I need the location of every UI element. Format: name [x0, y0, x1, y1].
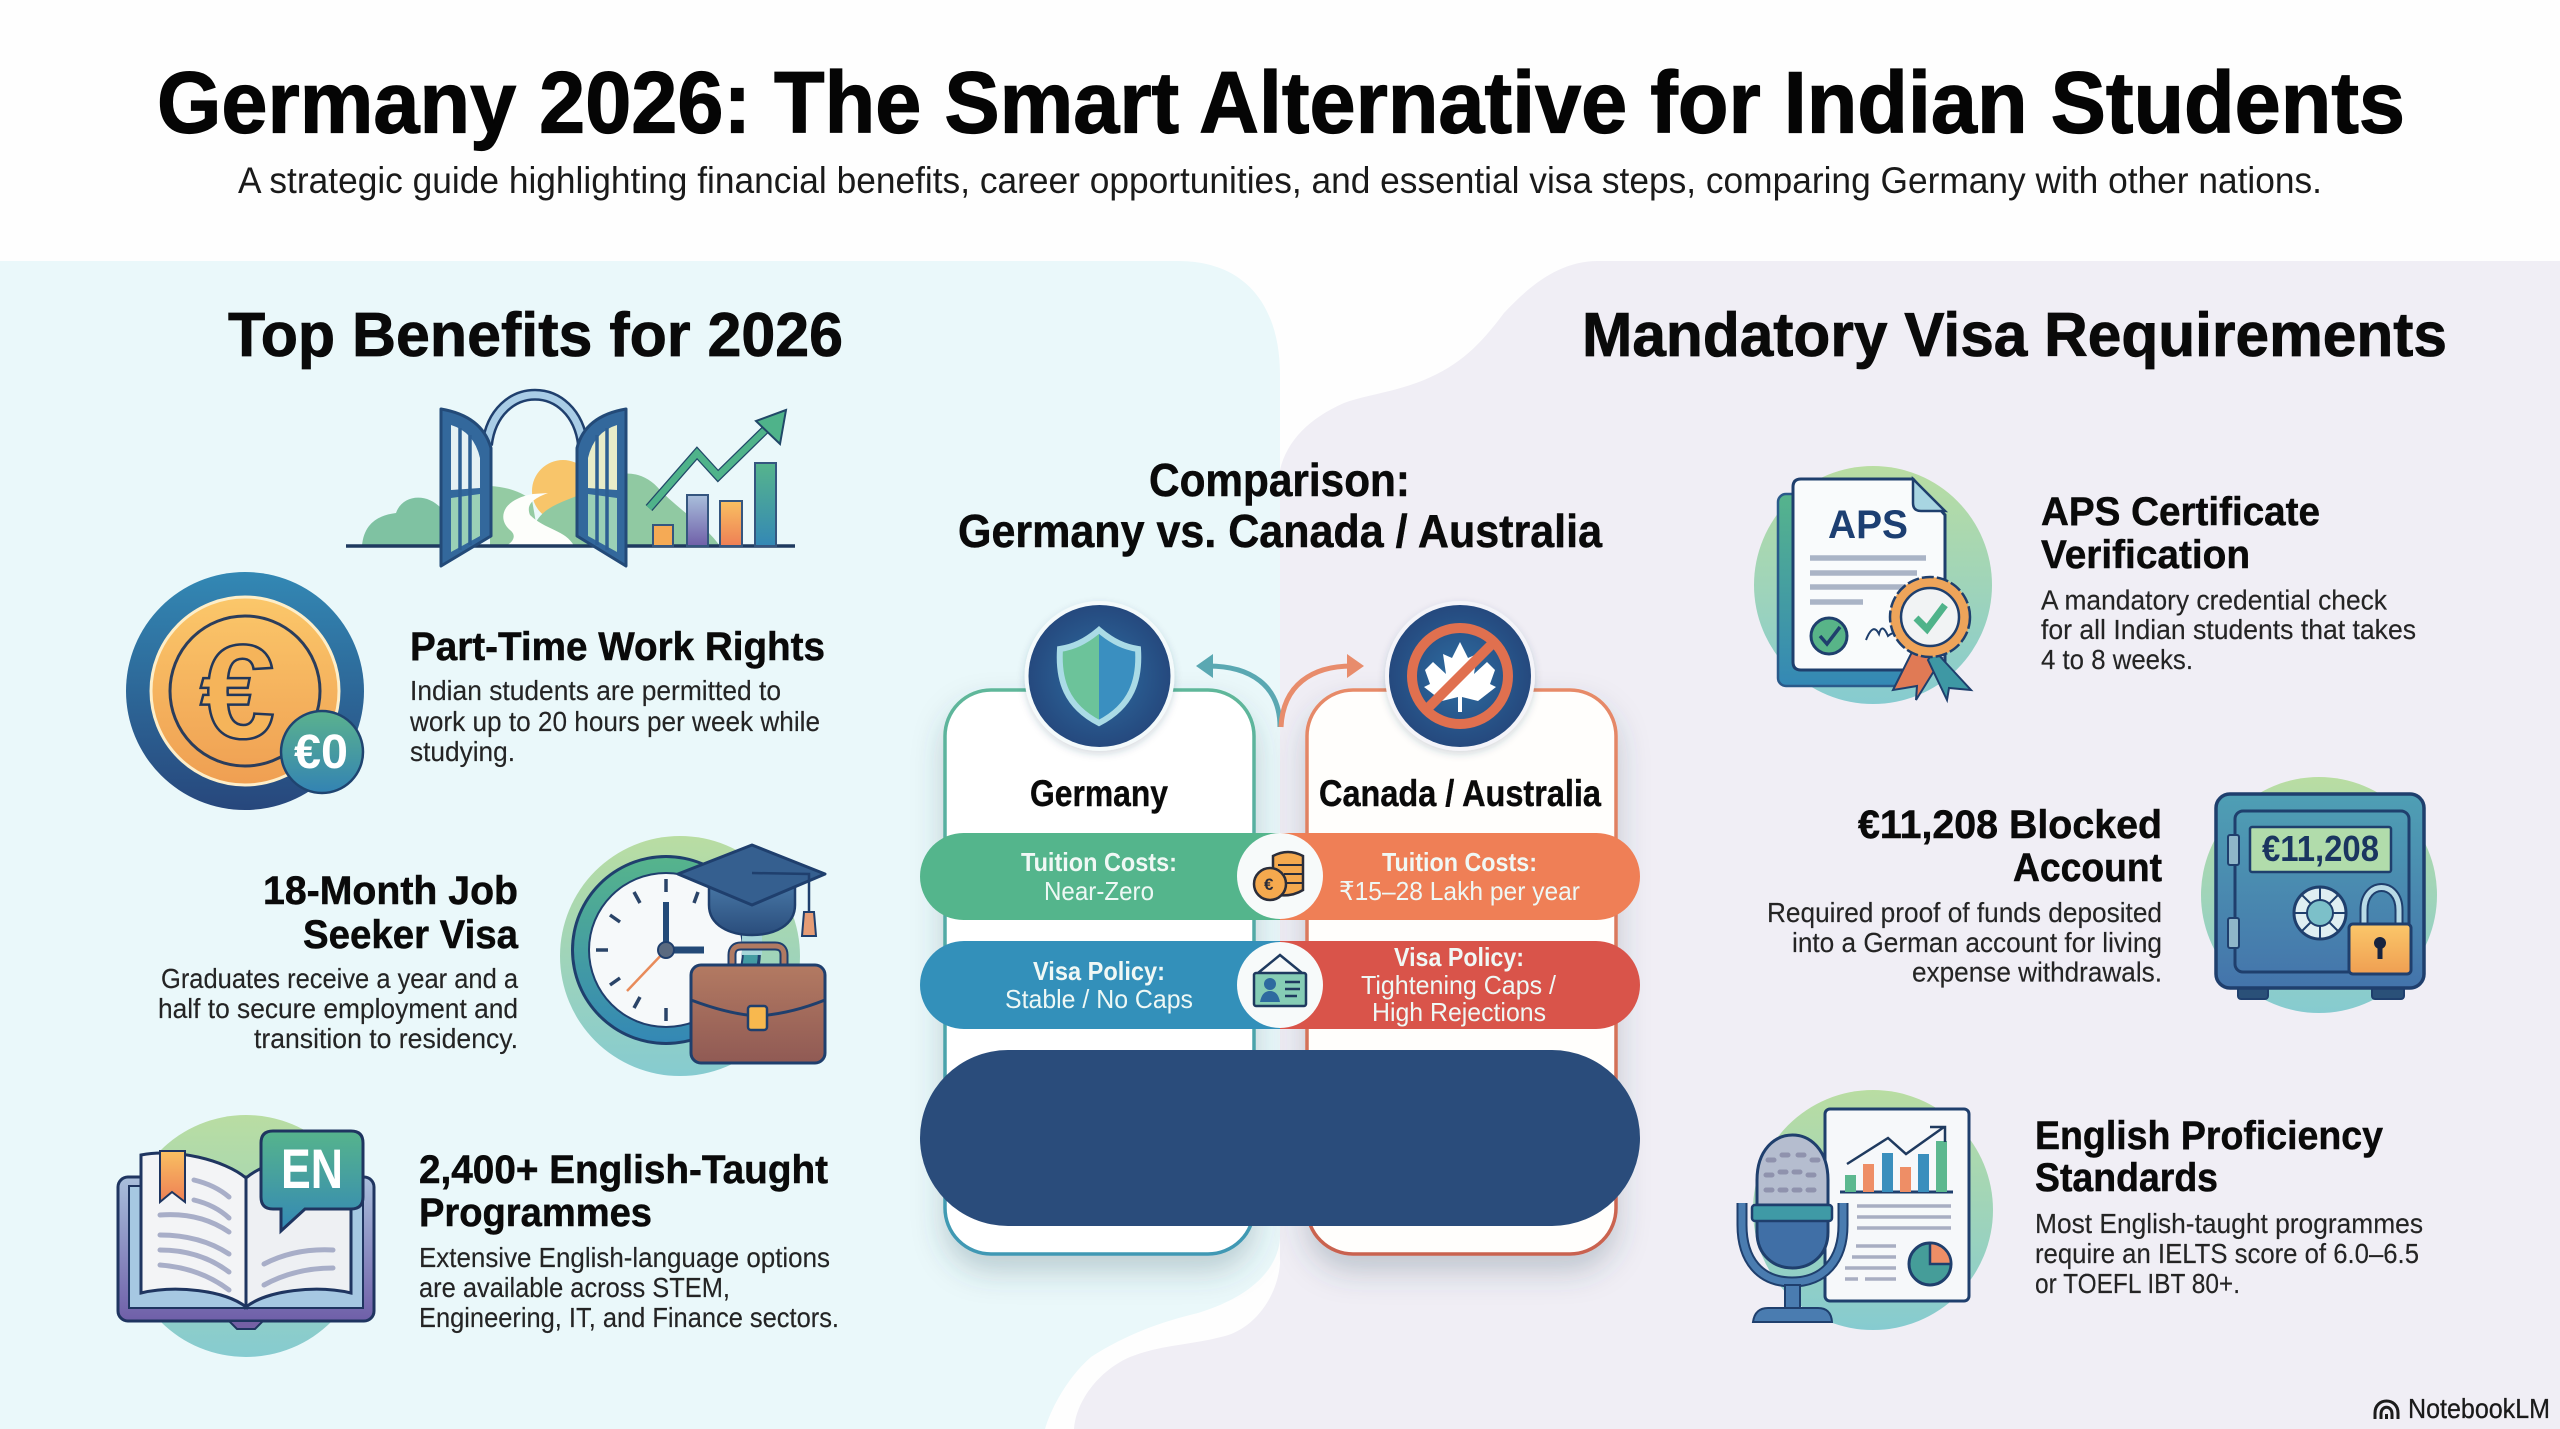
label: germany: Germany [1030, 773, 1168, 814]
block: aps certificate [1754, 466, 2416, 704]
title: Germany 2026: The Smart Alternative for Indian Students [157, 54, 2405, 152]
heading: aps certificate: Verification [2041, 533, 2250, 577]
icon: open gate and growth chart [346, 395, 795, 566]
icon: clock, cap and briefcase [560, 836, 825, 1076]
panel: benefits background [0, 261, 1280, 1429]
text: blocked account description: into a German account for living [1792, 927, 2162, 958]
heading: comparison: Comparison: [1149, 454, 1410, 506]
block: part-time work rights [126, 572, 825, 810]
text: job seeker description: Graduates receive a year and a [161, 963, 518, 994]
icon: coins [1237, 833, 1323, 919]
navy summary band [920, 1050, 1640, 1226]
text: canada and australia visa policy: Visa Policy: [1394, 942, 1524, 972]
heading: english proficiency [2035, 1114, 2384, 1200]
text: aps description [2041, 584, 2416, 675]
text: germany tuition: Tuition Costs: [1021, 847, 1177, 877]
text: part-time description: studying. [410, 736, 515, 767]
panel: top benefits [118, 301, 843, 1357]
arrow: toward germany [1196, 654, 1280, 727]
heading: english-taught programmes: 2,400+ English-Taught [419, 1148, 828, 1192]
icon: aps certificate with seal [1754, 466, 1992, 704]
icon: microphone and score report [1742, 1090, 1993, 1330]
text: blocked account description: expense withdrawals. [1912, 956, 2162, 988]
text: blocked account description: Required proof of funds deposited [1767, 897, 2162, 928]
heading: job seeker visa: Seeker Visa [303, 913, 519, 957]
text: canada and australia visa policy: High Rejections [1372, 997, 1546, 1027]
card: germany [945, 690, 1254, 1254]
text: germany tuition: Near-Zero [1044, 876, 1154, 906]
heading: comparison: Germany vs. Canada / Australia [958, 505, 1602, 557]
text: english proficiency description: or TOEFL IBT 80+. [2035, 1268, 2240, 1299]
heading: blocked account: €11,208 Blocked [1858, 803, 2162, 847]
heading: aps certificate [2041, 490, 2320, 577]
text: english proficiency description: require an IELTS score of 6.0–6.5 [2035, 1238, 2419, 1269]
row: tuition costs [920, 833, 1640, 920]
arrow: toward canada and australia [1281, 654, 1364, 727]
text: germany visa policy: Stable / No Caps [1005, 984, 1193, 1014]
text: programmes description: Engineering, IT, and Finance sectors. [419, 1302, 839, 1333]
card: canada and australia [1307, 690, 1616, 1254]
text: part-time description: work up to 20 hours per week while [409, 706, 820, 737]
label: canada and australia: Canada / Australia [1319, 773, 1601, 814]
text: canada and australia tuition: ₹15–28 Lakh per year [1339, 876, 1580, 906]
panel: visa requirements background [1074, 261, 2560, 1429]
icon: euro coin [126, 572, 364, 810]
heading: job seeker visa: 18-Month Job [263, 869, 518, 913]
row: visa policy [920, 941, 1640, 1029]
icon: aps certificate with seal: APS [1828, 503, 1908, 547]
icon: open book with EN bubble [118, 1115, 374, 1357]
text: blocked account description [1767, 897, 2162, 988]
heading: part-time work rights: Part-Time Work Rights [410, 625, 825, 669]
text: aps description: A mandatory credential check [2041, 584, 2388, 616]
heading: blocked account: Account [2013, 846, 2162, 890]
heading: english-taught programmes: Programmes [419, 1191, 652, 1235]
icon: euro coin: € [200, 618, 275, 767]
heading: aps certificate: APS Certificate [2041, 490, 2320, 534]
text: germany visa policy [1005, 956, 1193, 1014]
text: part-time description: Indian students are permitted to [410, 675, 781, 706]
text: job seeker description [158, 963, 518, 1054]
heading: blocked account [1858, 803, 2162, 890]
icon: open book with EN bubble: EN [281, 1137, 343, 1200]
heading: top benefits: Top Benefits for 2026 [228, 301, 843, 370]
text: programmes description: are available across STEM, [419, 1272, 730, 1303]
block: blocked account [1767, 777, 2437, 1013]
text: job seeker description: half to secure employment and [158, 993, 518, 1024]
heading: job seeker visa [263, 869, 519, 957]
heading: english proficiency: Standards [2035, 1156, 2218, 1200]
block: english-taught programmes [118, 1115, 839, 1357]
text: job seeker description: transition to residency. [254, 1023, 518, 1054]
icon: safe with padlock [2201, 777, 2437, 1013]
panel: comparison [920, 454, 1640, 1254]
block: english proficiency [1742, 1090, 2423, 1330]
icon: euro coin: €0 [294, 726, 348, 779]
text: english proficiency description [2035, 1208, 2423, 1299]
heading: comparison [958, 454, 1602, 557]
panel: mandatory visa requirements [1582, 301, 2447, 1330]
text: aps description: for all Indian students that takes [2041, 614, 2416, 645]
text: germany visa policy: Visa Policy: [1033, 956, 1165, 986]
icon: germany shield [1024, 601, 1174, 751]
block: job seeker visa [158, 836, 825, 1076]
icon: prohibited maple leaf [1385, 601, 1535, 751]
text: programmes description [419, 1242, 839, 1333]
text: germany tuition [1021, 847, 1177, 906]
heading: english-taught programmes [419, 1148, 828, 1235]
icon: visa id card [1237, 942, 1323, 1028]
subtitle: A strategic guide highlighting financial benefits, career opportunities, and essential visa steps, comparing Germany with other nations. [238, 160, 2322, 201]
text: canada and australia tuition: Tuition Costs: [1382, 847, 1537, 877]
icon: coins: € [1264, 875, 1274, 894]
text: canada and australia visa policy: Tightening Caps / [1361, 970, 1557, 1000]
text: canada and australia visa policy [1361, 942, 1557, 1027]
text: aps description: 4 to 8 weeks. [2041, 644, 2193, 675]
text: programmes description: Extensive English-language options [419, 1242, 830, 1273]
text: canada and australia tuition [1339, 847, 1580, 906]
icon: safe with padlock: €11,208 [2262, 828, 2379, 869]
heading: mandatory visa requirements: Mandatory Visa Requirements [1582, 301, 2447, 370]
text: english proficiency description: Most English-taught programmes [2035, 1208, 2423, 1239]
heading: english proficiency: English Proficiency [2035, 1114, 2384, 1158]
text: part-time description [409, 675, 820, 767]
